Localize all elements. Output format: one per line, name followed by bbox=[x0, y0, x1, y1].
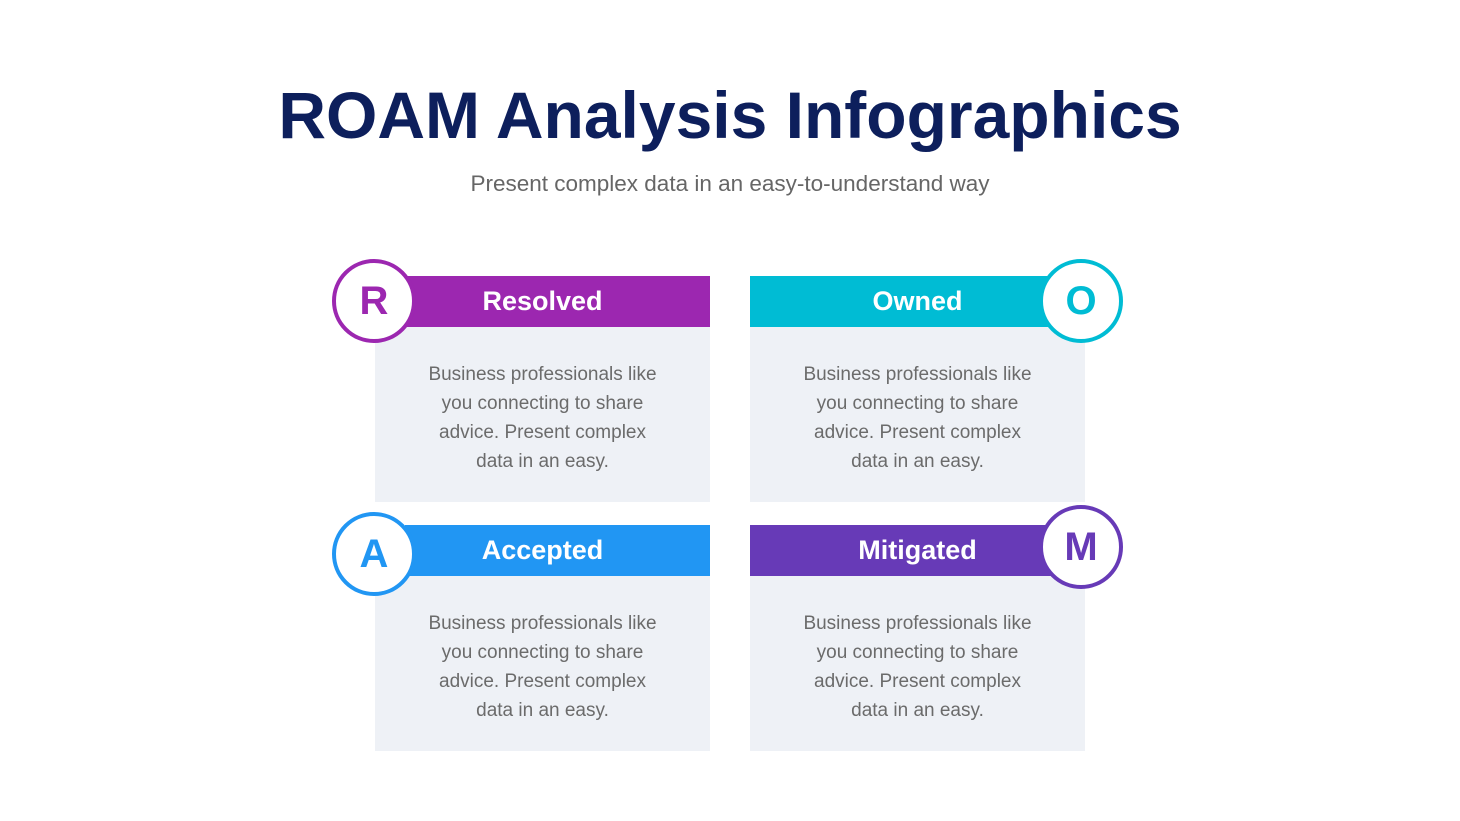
header label: Accepted bbox=[482, 535, 603, 565]
icon: M circle bbox=[1039, 505, 1123, 589]
text block: data in an easy. bbox=[476, 700, 609, 721]
text block bbox=[750, 327, 1085, 502]
header label: Owned bbox=[872, 286, 962, 316]
header bar bbox=[750, 276, 1055, 327]
text block: data in an easy. bbox=[476, 451, 609, 472]
icon: A circle bbox=[332, 512, 416, 596]
header bar bbox=[405, 525, 710, 576]
title: ROAM Analysis Infographics bbox=[278, 78, 1182, 152]
text block bbox=[375, 576, 710, 751]
text block bbox=[375, 327, 710, 502]
panel: resolved bbox=[375, 276, 710, 502]
text block: Business professionals like bbox=[428, 613, 657, 634]
icon: O circle bbox=[1039, 259, 1123, 343]
text block: advice. Present complex bbox=[814, 671, 1021, 692]
icon: A circle: A bbox=[360, 532, 388, 576]
text block: advice. Present complex bbox=[439, 671, 646, 692]
text block: advice. Present complex bbox=[439, 422, 646, 443]
text block: data in an easy. bbox=[851, 700, 984, 721]
header label: Mitigated bbox=[858, 535, 977, 565]
text block: you connecting to share bbox=[817, 393, 1018, 414]
text block: advice. Present complex bbox=[814, 422, 1021, 443]
text block: Business professionals like bbox=[803, 364, 1032, 385]
header label: Resolved bbox=[482, 286, 603, 316]
subtitle: Present complex data in an easy-to-understand way bbox=[470, 171, 990, 196]
icon: R circle bbox=[332, 259, 416, 343]
text block: you connecting to share bbox=[442, 642, 643, 663]
header bar bbox=[750, 525, 1055, 576]
icon: O circle: O bbox=[1065, 279, 1097, 323]
text block: Business professionals like bbox=[428, 364, 657, 385]
panel: owned bbox=[750, 276, 1085, 502]
panel: mitigated bbox=[750, 525, 1085, 751]
icon: R circle: R bbox=[360, 279, 388, 323]
text block: Business professionals like bbox=[803, 613, 1032, 634]
text block: you connecting to share bbox=[817, 642, 1018, 663]
panel: accepted bbox=[375, 525, 710, 751]
text block bbox=[750, 576, 1085, 751]
header bar bbox=[405, 276, 710, 327]
text block: data in an easy. bbox=[851, 451, 984, 472]
text block: you connecting to share bbox=[442, 393, 643, 414]
icon: M circle: M bbox=[1064, 525, 1098, 569]
